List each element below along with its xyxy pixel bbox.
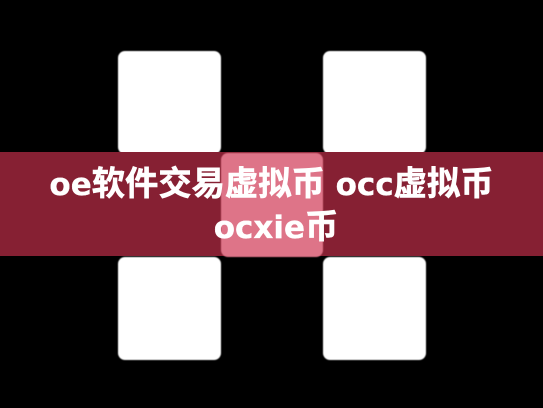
tile: top left [118, 51, 221, 154]
tile: bottom left [118, 257, 221, 360]
title: ocxie币 [214, 199, 338, 248]
tile: bottom right [323, 257, 426, 360]
tile: top right [323, 51, 426, 154]
tile: center tinted [221, 153, 323, 257]
title [49, 156, 494, 248]
title band [0, 152, 543, 256]
title: oe软件交易虚拟币 occ虚拟币 [49, 156, 494, 205]
